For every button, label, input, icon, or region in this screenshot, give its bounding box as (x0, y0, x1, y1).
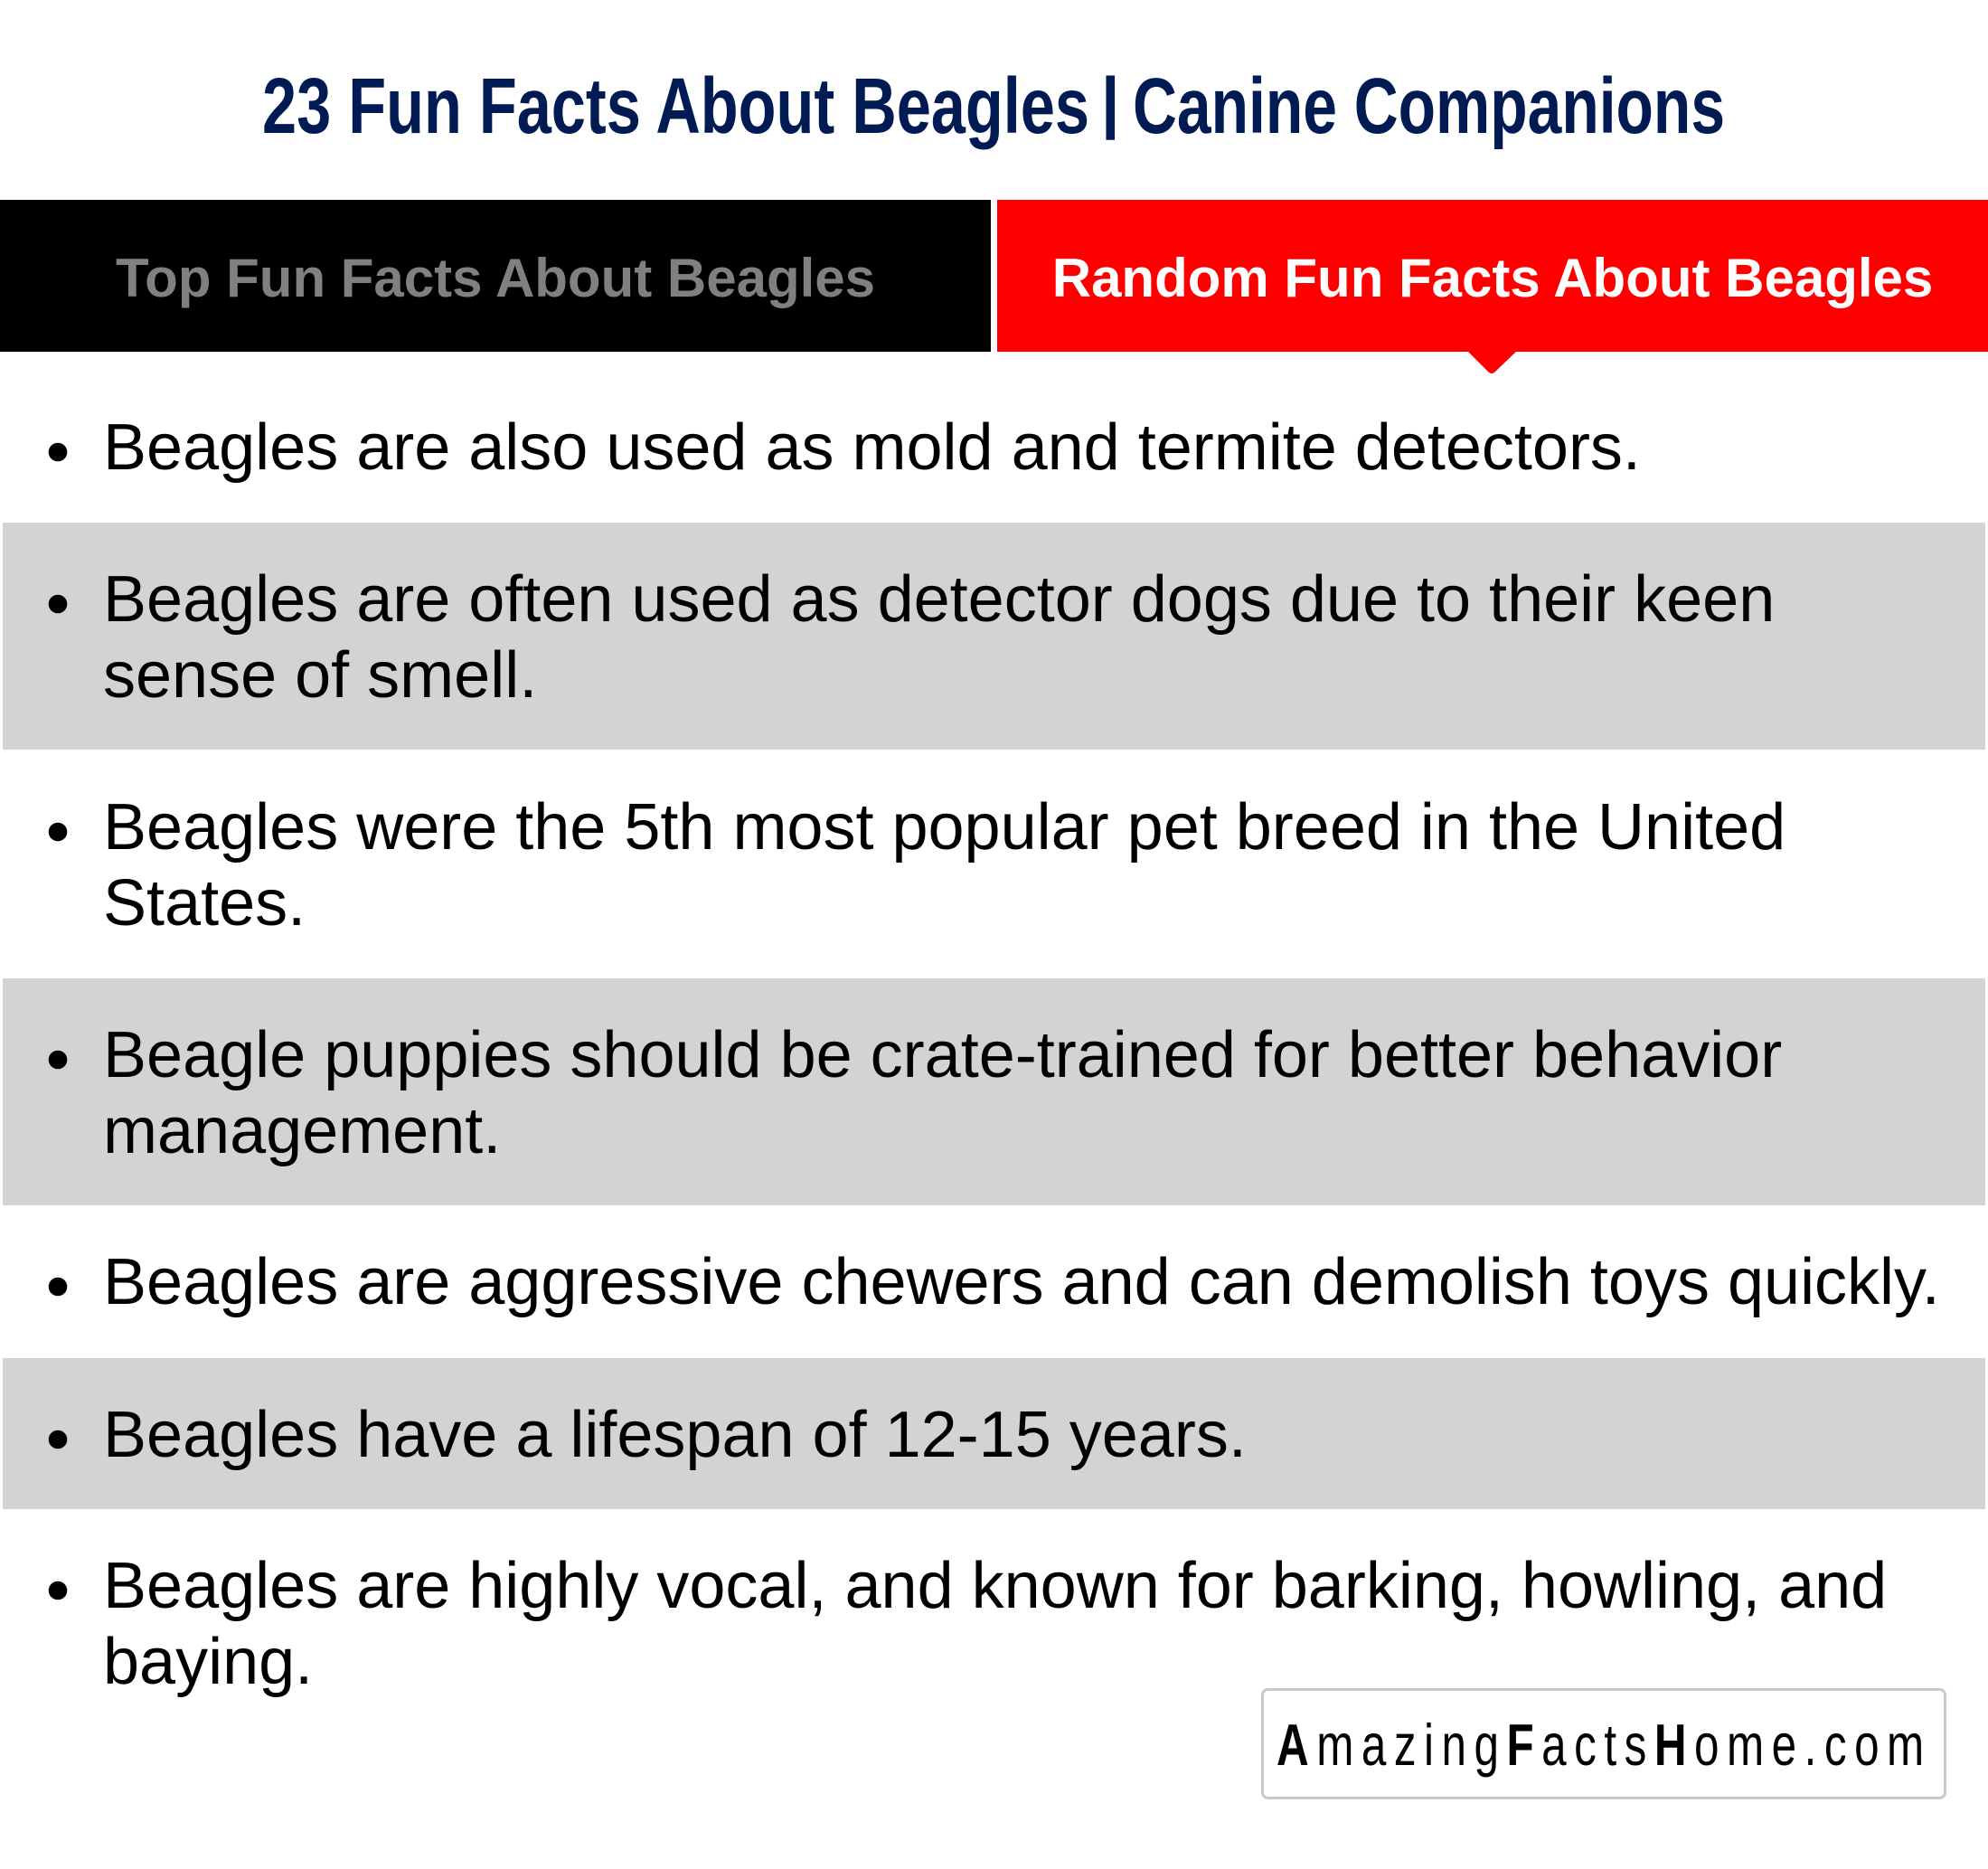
fact 7: baying. (103, 1626, 313, 1698)
fact 5: Beagles are aggressive chewers and can demolish toys quickly. (103, 1246, 1940, 1318)
fact 7 (49, 1550, 1887, 1698)
fact 2: Beagles are often used as detector dogs due to their keen (103, 563, 1775, 636)
tab: top fun facts (0, 200, 991, 352)
tab: random fun facts (active): Random Fun Facts About Beagles (1052, 248, 1933, 308)
title: | (1101, 63, 1120, 140)
tab: random fun facts (active) (997, 200, 1988, 373)
fact 3: Beagles were the 5th most popular pet breed in the United (103, 791, 1785, 864)
fact 4 (3, 978, 1985, 1205)
title: Canine Companions (1133, 62, 1725, 150)
fact 3 (49, 791, 1785, 939)
tab: top fun facts: Top Fun Facts About Beagles (116, 248, 875, 308)
fact 2 (3, 523, 1985, 750)
fact 1: Beagles are also used as mold and termite detectors. (103, 411, 1641, 484)
fact 3: States. (103, 867, 306, 939)
fact 7: Beagles are highly vocal, and known for barking, howling, and (103, 1550, 1887, 1622)
title: 23 Fun Facts About Beagles (262, 62, 1089, 150)
fact 2: sense of smell. (103, 639, 537, 712)
fact 6 (3, 1358, 1985, 1509)
fact 4: Beagle puppies should be crate-trained for better behavior (103, 1019, 1782, 1091)
logo: AmazingFactsHome.com: AmazingFactsHome.com (1277, 1713, 1932, 1779)
logo: AmazingFactsHome.com (1262, 1689, 1946, 1798)
fact 6: Beagles have a lifespan of 12-15 years. (103, 1399, 1247, 1471)
fact 4: management. (103, 1095, 501, 1167)
